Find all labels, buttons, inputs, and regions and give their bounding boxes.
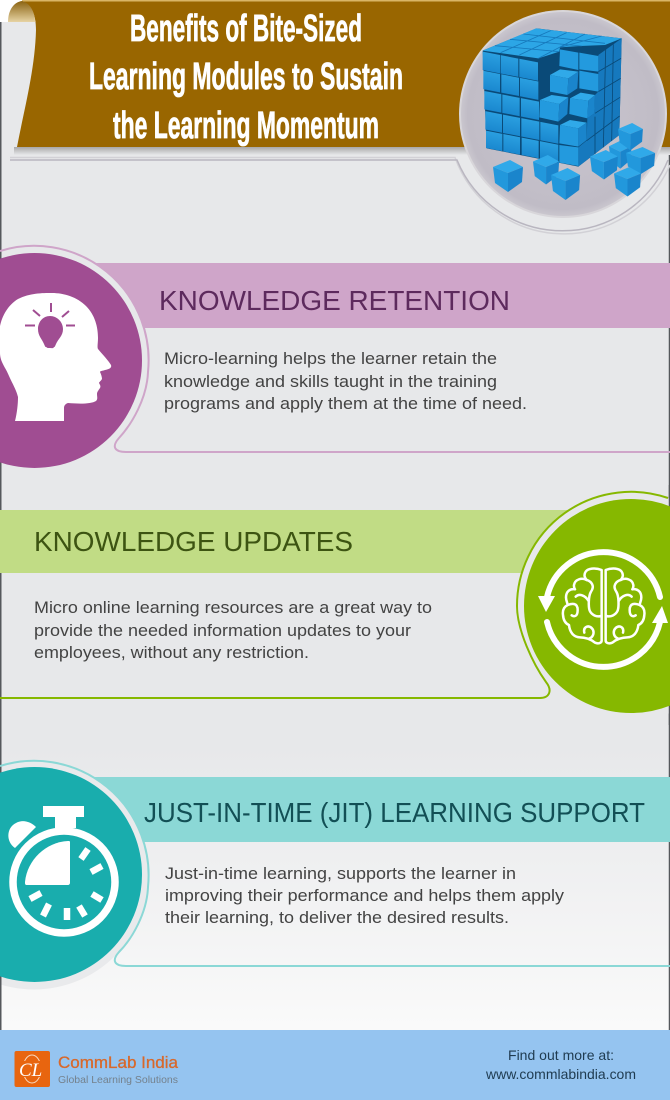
body text: employees, without any restriction. (34, 643, 309, 662)
panel: knowledge retention (0, 240, 670, 480)
contact text: Find out more at: (508, 1047, 614, 1063)
panel: knowledge updates (0, 485, 670, 725)
ring gap (0, 760, 148, 990)
callout outline (0, 492, 668, 698)
logo mark (14, 1051, 50, 1087)
heading: KNOWLEDGE UPDATES (34, 526, 353, 557)
ribbon curl (8, 1, 35, 22)
banner shadow (14, 147, 670, 155)
title: Learning Modules to Sustain (89, 56, 403, 98)
heading: JUST-IN-TIME (JIT) LEARNING SUPPORT (144, 797, 645, 828)
title: Benefits of Bite-Sized (130, 8, 362, 50)
icon: brain with cycle arrows (538, 552, 668, 667)
contact text: www.commlabindia.com (485, 1066, 636, 1082)
ribbon top edge (22, 0, 670, 2)
body text (164, 349, 527, 413)
body text: Micro-learning helps the learner retain the (164, 349, 497, 368)
contact text (485, 1047, 636, 1082)
cube block top (483, 28, 622, 58)
header band (90, 777, 670, 842)
title (89, 8, 403, 147)
ring gap (517, 492, 670, 720)
body text (165, 864, 565, 927)
icon disc (0, 767, 142, 982)
body text: provide the needed information updates to your (34, 621, 411, 640)
body text: programs and apply them at the time of need. (164, 394, 527, 413)
image disc (459, 10, 667, 218)
body text: Just-in-time learning, supports the learner in (165, 864, 516, 883)
loose cubes (493, 123, 655, 200)
right border segment (668, 485, 670, 725)
icon: stopwatch (8, 806, 115, 933)
footer band (0, 1030, 670, 1100)
cube block upper front cells (559, 49, 598, 166)
icon: head with light bulb (0, 293, 111, 421)
cube block silhouette (483, 28, 622, 167)
image: stack of blue cubes (459, 10, 667, 218)
body text: improving their performance and helps them apply (165, 886, 565, 905)
footer (0, 1030, 670, 1100)
logo name: CommLab India (58, 1053, 179, 1072)
icon disc (0, 253, 142, 468)
banner ribbon (17, 1, 670, 147)
icon disc (524, 499, 670, 713)
logo tagline: Global Learning Solutions (58, 1074, 178, 1086)
left border segment (0, 240, 2, 480)
logo mark: CL (19, 1060, 42, 1081)
header rule and ring around image (10, 158, 670, 234)
heading: KNOWLEDGE RETENTION (159, 285, 510, 316)
callout outline (0, 761, 670, 966)
title: the Learning Momentum (113, 105, 379, 147)
body text (34, 598, 432, 662)
body text: Micro online learning resources are a great way to (34, 598, 432, 617)
cube block stepped cubes (539, 69, 595, 147)
panel: just-in-time learning support (0, 755, 670, 995)
body text: their learning, to deliver the desired results. (165, 908, 509, 927)
header banner (8, 0, 670, 155)
cube block (483, 28, 622, 167)
ring gap (0, 246, 148, 474)
cube block right face (578, 38, 622, 167)
body text: knowledge and skills taught in the training (164, 372, 497, 391)
callout outline (0, 246, 670, 452)
left border segment (0, 755, 2, 995)
cube block front cells (483, 52, 558, 162)
header band (0, 510, 570, 573)
header band (90, 263, 670, 328)
